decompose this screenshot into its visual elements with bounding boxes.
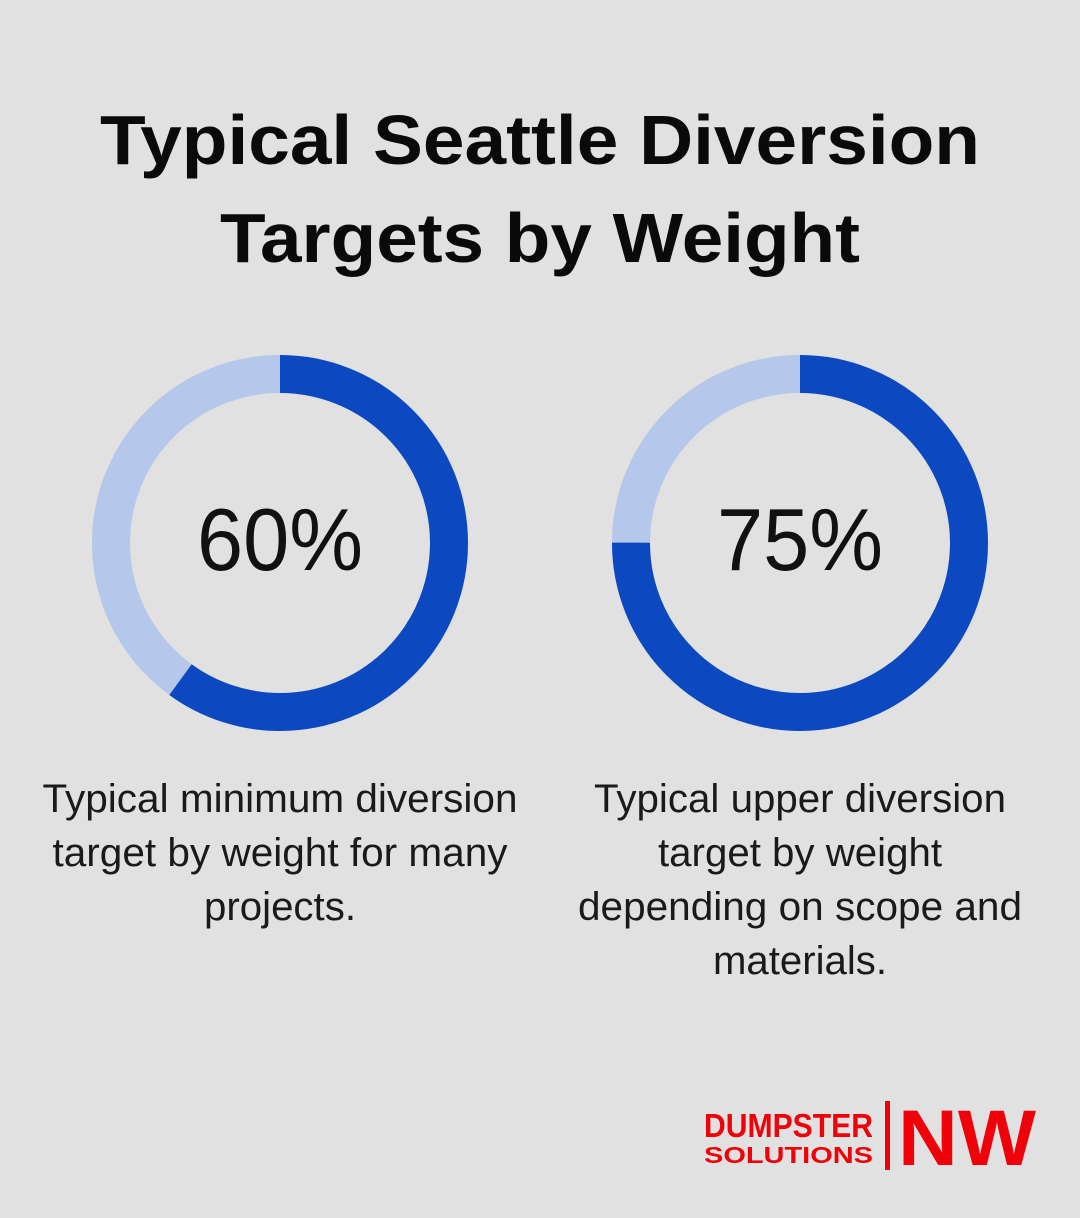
text block: left description: Typical minimum diversion [42, 777, 518, 821]
title: Typical Seattle Diversion [100, 101, 980, 179]
logo: SOLUTIONS [704, 1142, 873, 1168]
text block: left description [42, 777, 518, 929]
donut chart: 75% [631, 374, 969, 712]
text block: right description: depending on scope and [578, 885, 1022, 929]
text block: right description: target by weight [658, 831, 942, 875]
text block: right description [578, 777, 1022, 983]
donut chart: 60%: 60% [197, 490, 363, 589]
text block: right description: materials. [713, 939, 887, 983]
logo: DUMPSTER [704, 1107, 873, 1144]
text block: left description: projects. [204, 885, 356, 929]
title [100, 101, 980, 277]
text block: left description: target by weight for many [52, 831, 508, 875]
donut chart: 60% [111, 374, 449, 712]
logo: NW [898, 1093, 1036, 1182]
text block: right description: Typical upper diversion [594, 777, 1006, 821]
title: Targets by Weight [220, 199, 860, 277]
logo [704, 1093, 1036, 1182]
donut chart: 75%: 75% [717, 490, 883, 589]
